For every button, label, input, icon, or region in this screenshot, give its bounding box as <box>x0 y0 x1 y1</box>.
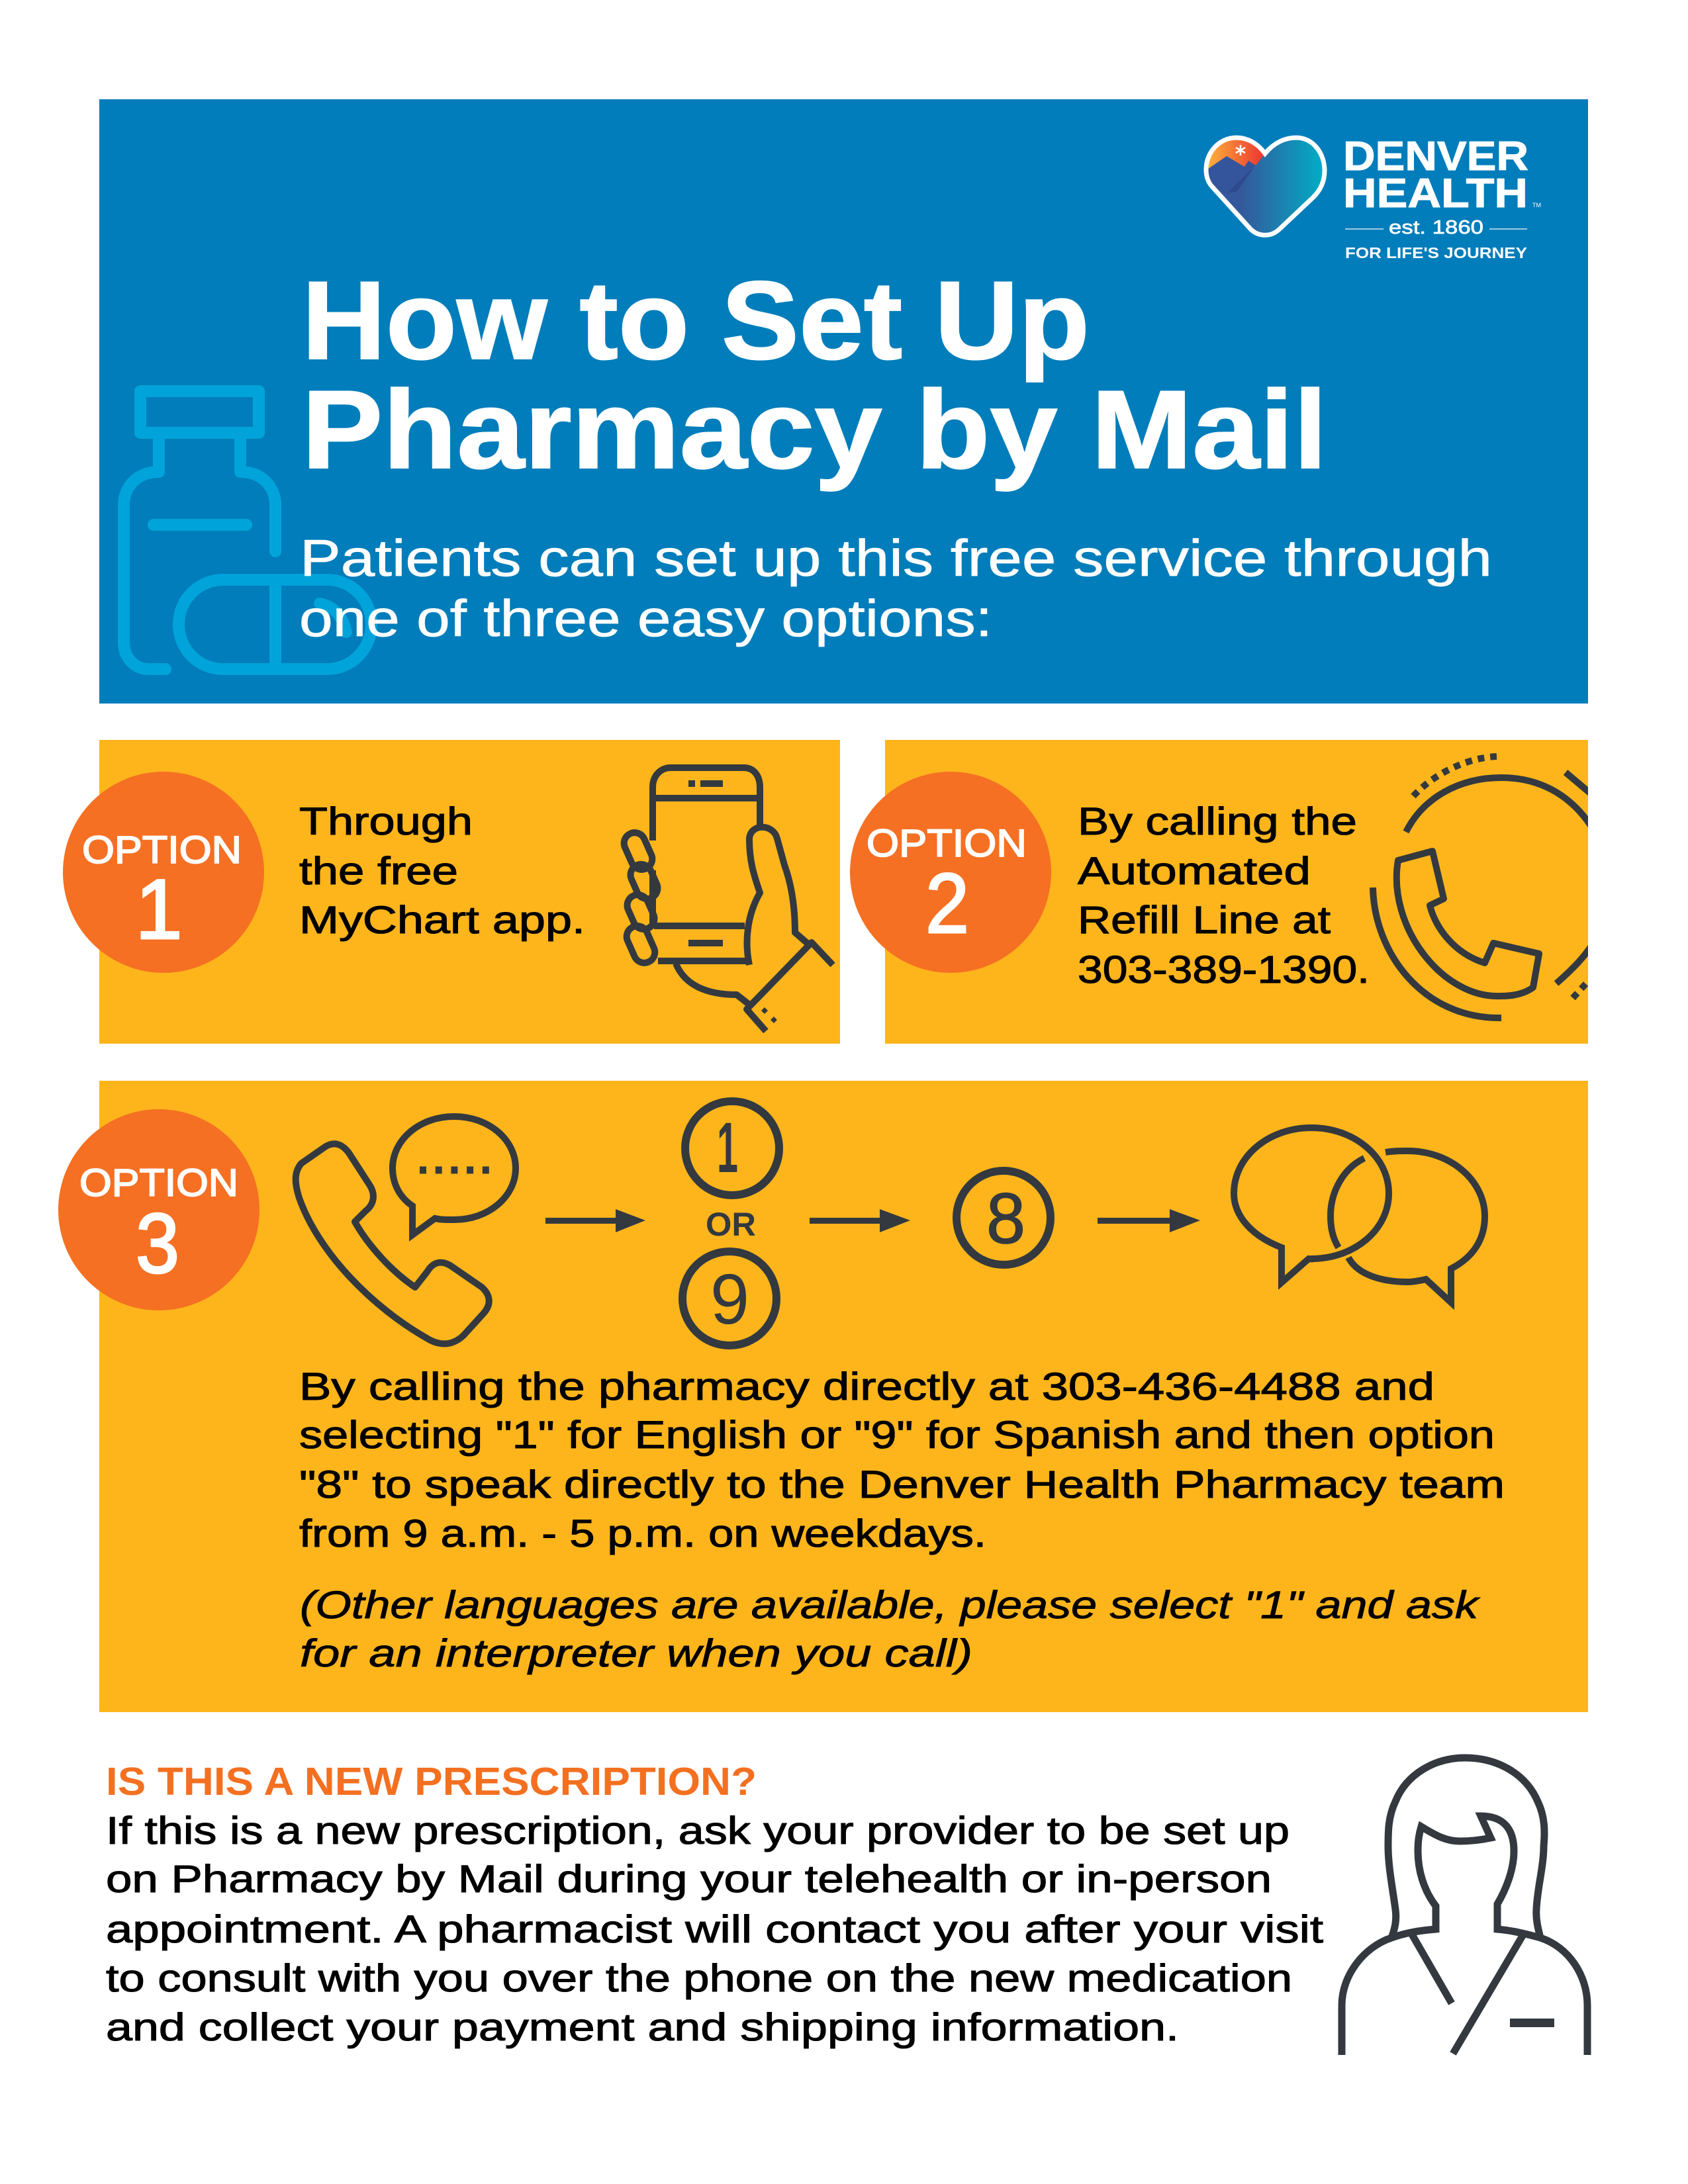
logo wordmark: TM <box>1532 202 1541 208</box>
arrow 3 <box>1098 1209 1200 1232</box>
text: option 3 instructions: selecting "1" for English or "9" for Spanish and then option <box>299 1414 1495 1457</box>
text: new prescription body: on Pharmacy by Mail during your telehealth or in-person <box>106 1858 1272 1901</box>
text: new prescription body <box>106 1809 1323 2049</box>
text: new prescription body: to consult with you over the phone on the new medication <box>106 1957 1292 2000</box>
step: press 9 <box>682 1251 776 1345</box>
panel: header <box>99 99 1588 704</box>
step: press 9: 9 <box>710 1259 749 1339</box>
icon: pharmacist <box>1342 1758 1587 2055</box>
badge: option 1 <box>63 772 264 973</box>
logo wordmark: est. 1860 <box>1389 217 1483 238</box>
logo wordmark: DENVER <box>1343 134 1528 179</box>
step: press 8: 8 <box>986 1178 1025 1258</box>
title <box>302 258 1327 492</box>
option 2 background <box>885 740 1588 1044</box>
text: new prescription body: If this is a new prescription, ask your provider to be set up <box>106 1809 1289 1852</box>
text: new prescription body: and collect your payment and shipping information. <box>106 2006 1179 2049</box>
text: option 1 <box>299 800 585 942</box>
option 1 background <box>99 740 840 1044</box>
text: option 2 <box>1078 800 1370 991</box>
logo: Denver Health <box>1201 132 1541 261</box>
icon: hand holding phone <box>621 768 833 1031</box>
title: How to Set Up <box>302 258 1090 383</box>
badge: option 2: 2 <box>925 856 969 951</box>
panel: option 3 <box>58 1081 1588 1712</box>
icon: conversation bubbles <box>1234 1128 1485 1302</box>
subtitle: Patients can set up this free service through <box>300 529 1492 587</box>
step: press 1: 1 <box>717 1107 738 1187</box>
header background <box>99 99 1588 704</box>
badge: option 3: 3 <box>136 1197 179 1291</box>
badge: option 2 <box>850 772 1051 973</box>
text: new prescription body: appointment. A pharmacist will contact you after your visit <box>106 1908 1323 1951</box>
subtitle <box>299 529 1492 647</box>
badge: option 1: 1 <box>135 862 183 957</box>
text: option 3 instructions: By calling the pharmacy directly at 303-436-4488 and <box>299 1365 1434 1408</box>
step: press 8 <box>957 1171 1051 1265</box>
logo wordmark: HEALTH <box>1343 171 1528 216</box>
text: option 1: the free <box>299 850 458 893</box>
logo heart <box>1203 135 1327 238</box>
label: or: OR <box>706 1206 756 1243</box>
panel: option 2 <box>850 740 1597 1044</box>
text: option 1: MyChart app. <box>299 899 585 942</box>
text: other languages note: for an interpreter when you call) <box>300 1632 972 1675</box>
title: Pharmacy by Mail <box>302 367 1327 492</box>
text: option 3 instructions: from 9 a.m. - 5 p.m. on weekdays. <box>299 1512 986 1555</box>
icon: telephone with signal arcs <box>1373 756 1597 1018</box>
text: option 2: 303-389-1390. <box>1078 948 1370 991</box>
text: option 3 instructions <box>299 1365 1505 1555</box>
text: option 2: Automated <box>1078 850 1311 893</box>
step: press 1 <box>685 1101 779 1195</box>
text: other languages note <box>300 1584 1481 1675</box>
text: option 3 instructions: "8" to speak directly to the Denver Health Pharmacy team <box>299 1463 1505 1506</box>
panel: option 1 <box>63 740 840 1044</box>
text: option 2: Refill Line at <box>1078 899 1331 942</box>
option 3 background <box>99 1081 1588 1712</box>
arrow 2 <box>810 1209 910 1232</box>
badge: option 3: OPTION <box>79 1161 238 1205</box>
icon: phone with speech bubble <box>296 1116 516 1343</box>
section: new prescription <box>106 1758 1587 2055</box>
heading: new prescription: IS THIS A NEW PRESCRIPTION? <box>106 1760 757 1803</box>
icon: pill bottle and capsule <box>124 391 371 669</box>
arrow 1 <box>545 1209 645 1232</box>
badge: option 3 <box>58 1109 259 1310</box>
logo wordmark: FOR LIFE'S JOURNEY <box>1345 244 1527 261</box>
text: other languages note: (Other languages are available, please select "1" and ask <box>300 1584 1481 1627</box>
text: option 1: Through <box>299 800 473 843</box>
text: option 2: By calling the <box>1078 800 1357 843</box>
badge: option 1: OPTION <box>82 829 242 872</box>
logo wordmark <box>1343 134 1541 261</box>
badge: option 2: OPTION <box>867 822 1027 865</box>
subtitle: one of three easy options: <box>299 589 992 647</box>
